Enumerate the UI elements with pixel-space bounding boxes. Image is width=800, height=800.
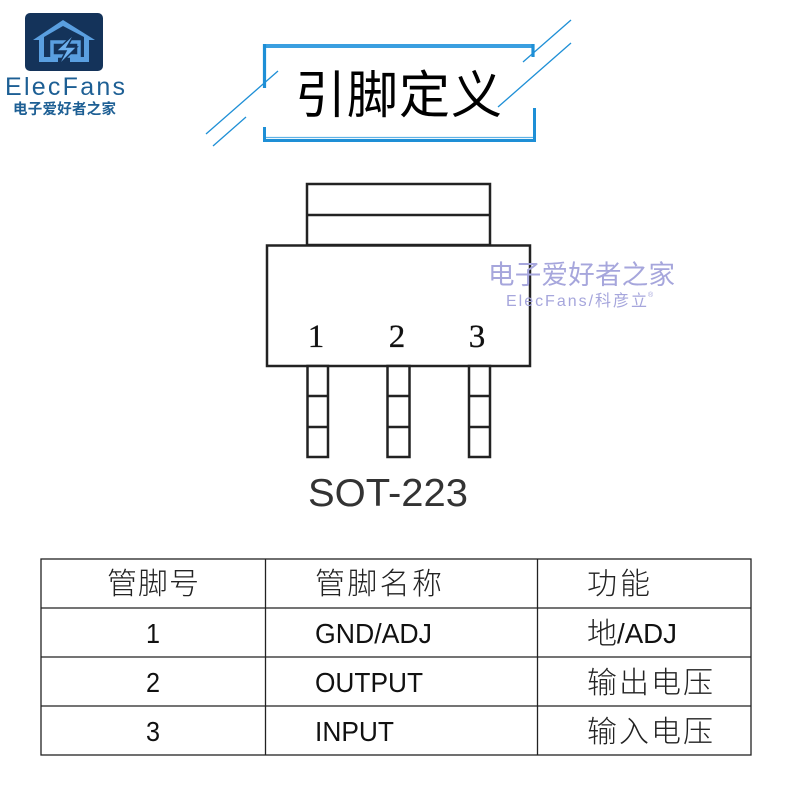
icon: house with lightning bolt [25,13,103,71]
header row: 管脚号 [107,559,199,603]
title with blue frame [206,20,571,146]
title frame [263,44,534,140]
row 2 [146,658,713,702]
SOT-223 package diagram [267,184,530,515]
logo: ElecFans [5,13,125,119]
package name: SOT-223 [308,472,468,515]
pin numbers: 1 [308,319,324,355]
row 3: 3 [146,716,160,747]
row 3: 输入电压 [587,707,713,751]
logo subtitle: 电子爱好者之家 [13,98,116,119]
row 3: INPUT [315,716,394,747]
logo wordmark: ElecFans [5,73,125,101]
pin 3 lead [469,366,490,457]
package outline [267,184,530,366]
pin 1 lead [308,366,328,457]
header row [107,559,650,603]
row 2: OUTPUT [315,667,423,698]
row 1 [146,609,677,653]
watermark line 2: ElecFans/科彦立 [506,292,647,310]
row 2: 输出电压 [587,658,713,702]
decorative slashes [206,20,571,146]
row 3 [146,707,713,751]
pin numbers [308,319,485,355]
title: 引脚定义 [295,54,502,128]
watermark line 1: 电子爱好者之家 [488,253,675,292]
registered mark: ® [648,291,654,299]
pin numbers: 3 [469,319,485,355]
row 2: 2 [146,667,160,698]
row 1: 1 [146,618,160,649]
pin 2 lead [388,366,410,457]
row 1: GND/ADJ [315,618,432,649]
header row: 管脚名称 [315,559,442,603]
watermark [488,253,675,310]
header row: 功能 [587,559,650,603]
row 1: 地 [587,609,617,653]
row 1: /ADJ [617,618,677,649]
pin definition table [41,559,751,755]
table grid [41,559,751,755]
pin numbers: 2 [389,319,405,355]
